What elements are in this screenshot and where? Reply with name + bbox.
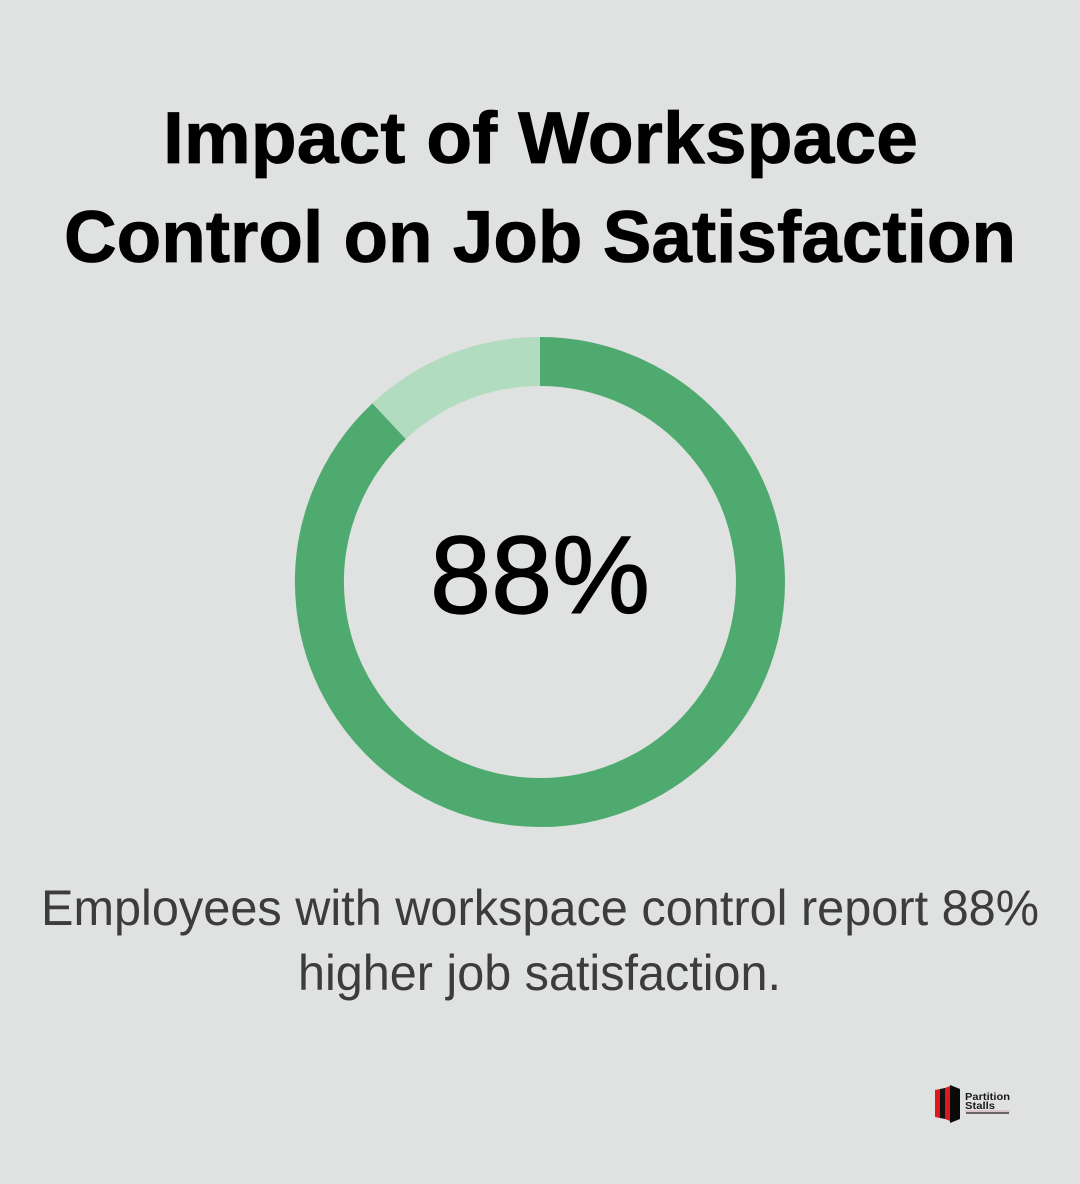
description text: Employees with workspace control report 88% bbox=[41, 880, 1039, 936]
title: Control on Job Satisfaction bbox=[64, 197, 1016, 278]
logo icon bbox=[935, 1085, 960, 1123]
88% segment bbox=[319, 362, 760, 802]
logo tagline bbox=[965, 1110, 1010, 1114]
remaining 12% segment bbox=[389, 361, 540, 421]
logo wordmark: Stalls bbox=[965, 1101, 995, 1112]
donut chart: 88% bbox=[319, 361, 760, 802]
logo wordmark bbox=[965, 1092, 1010, 1112]
center value: 88% bbox=[430, 514, 650, 637]
title bbox=[64, 98, 1016, 278]
logo: Partition Stalls bbox=[935, 1085, 1010, 1123]
description text bbox=[41, 880, 1039, 1001]
title: Impact of Workspace bbox=[163, 98, 918, 179]
logo wordmark: Partition bbox=[965, 1092, 1010, 1103]
description text: higher job satisfaction. bbox=[298, 945, 781, 1001]
